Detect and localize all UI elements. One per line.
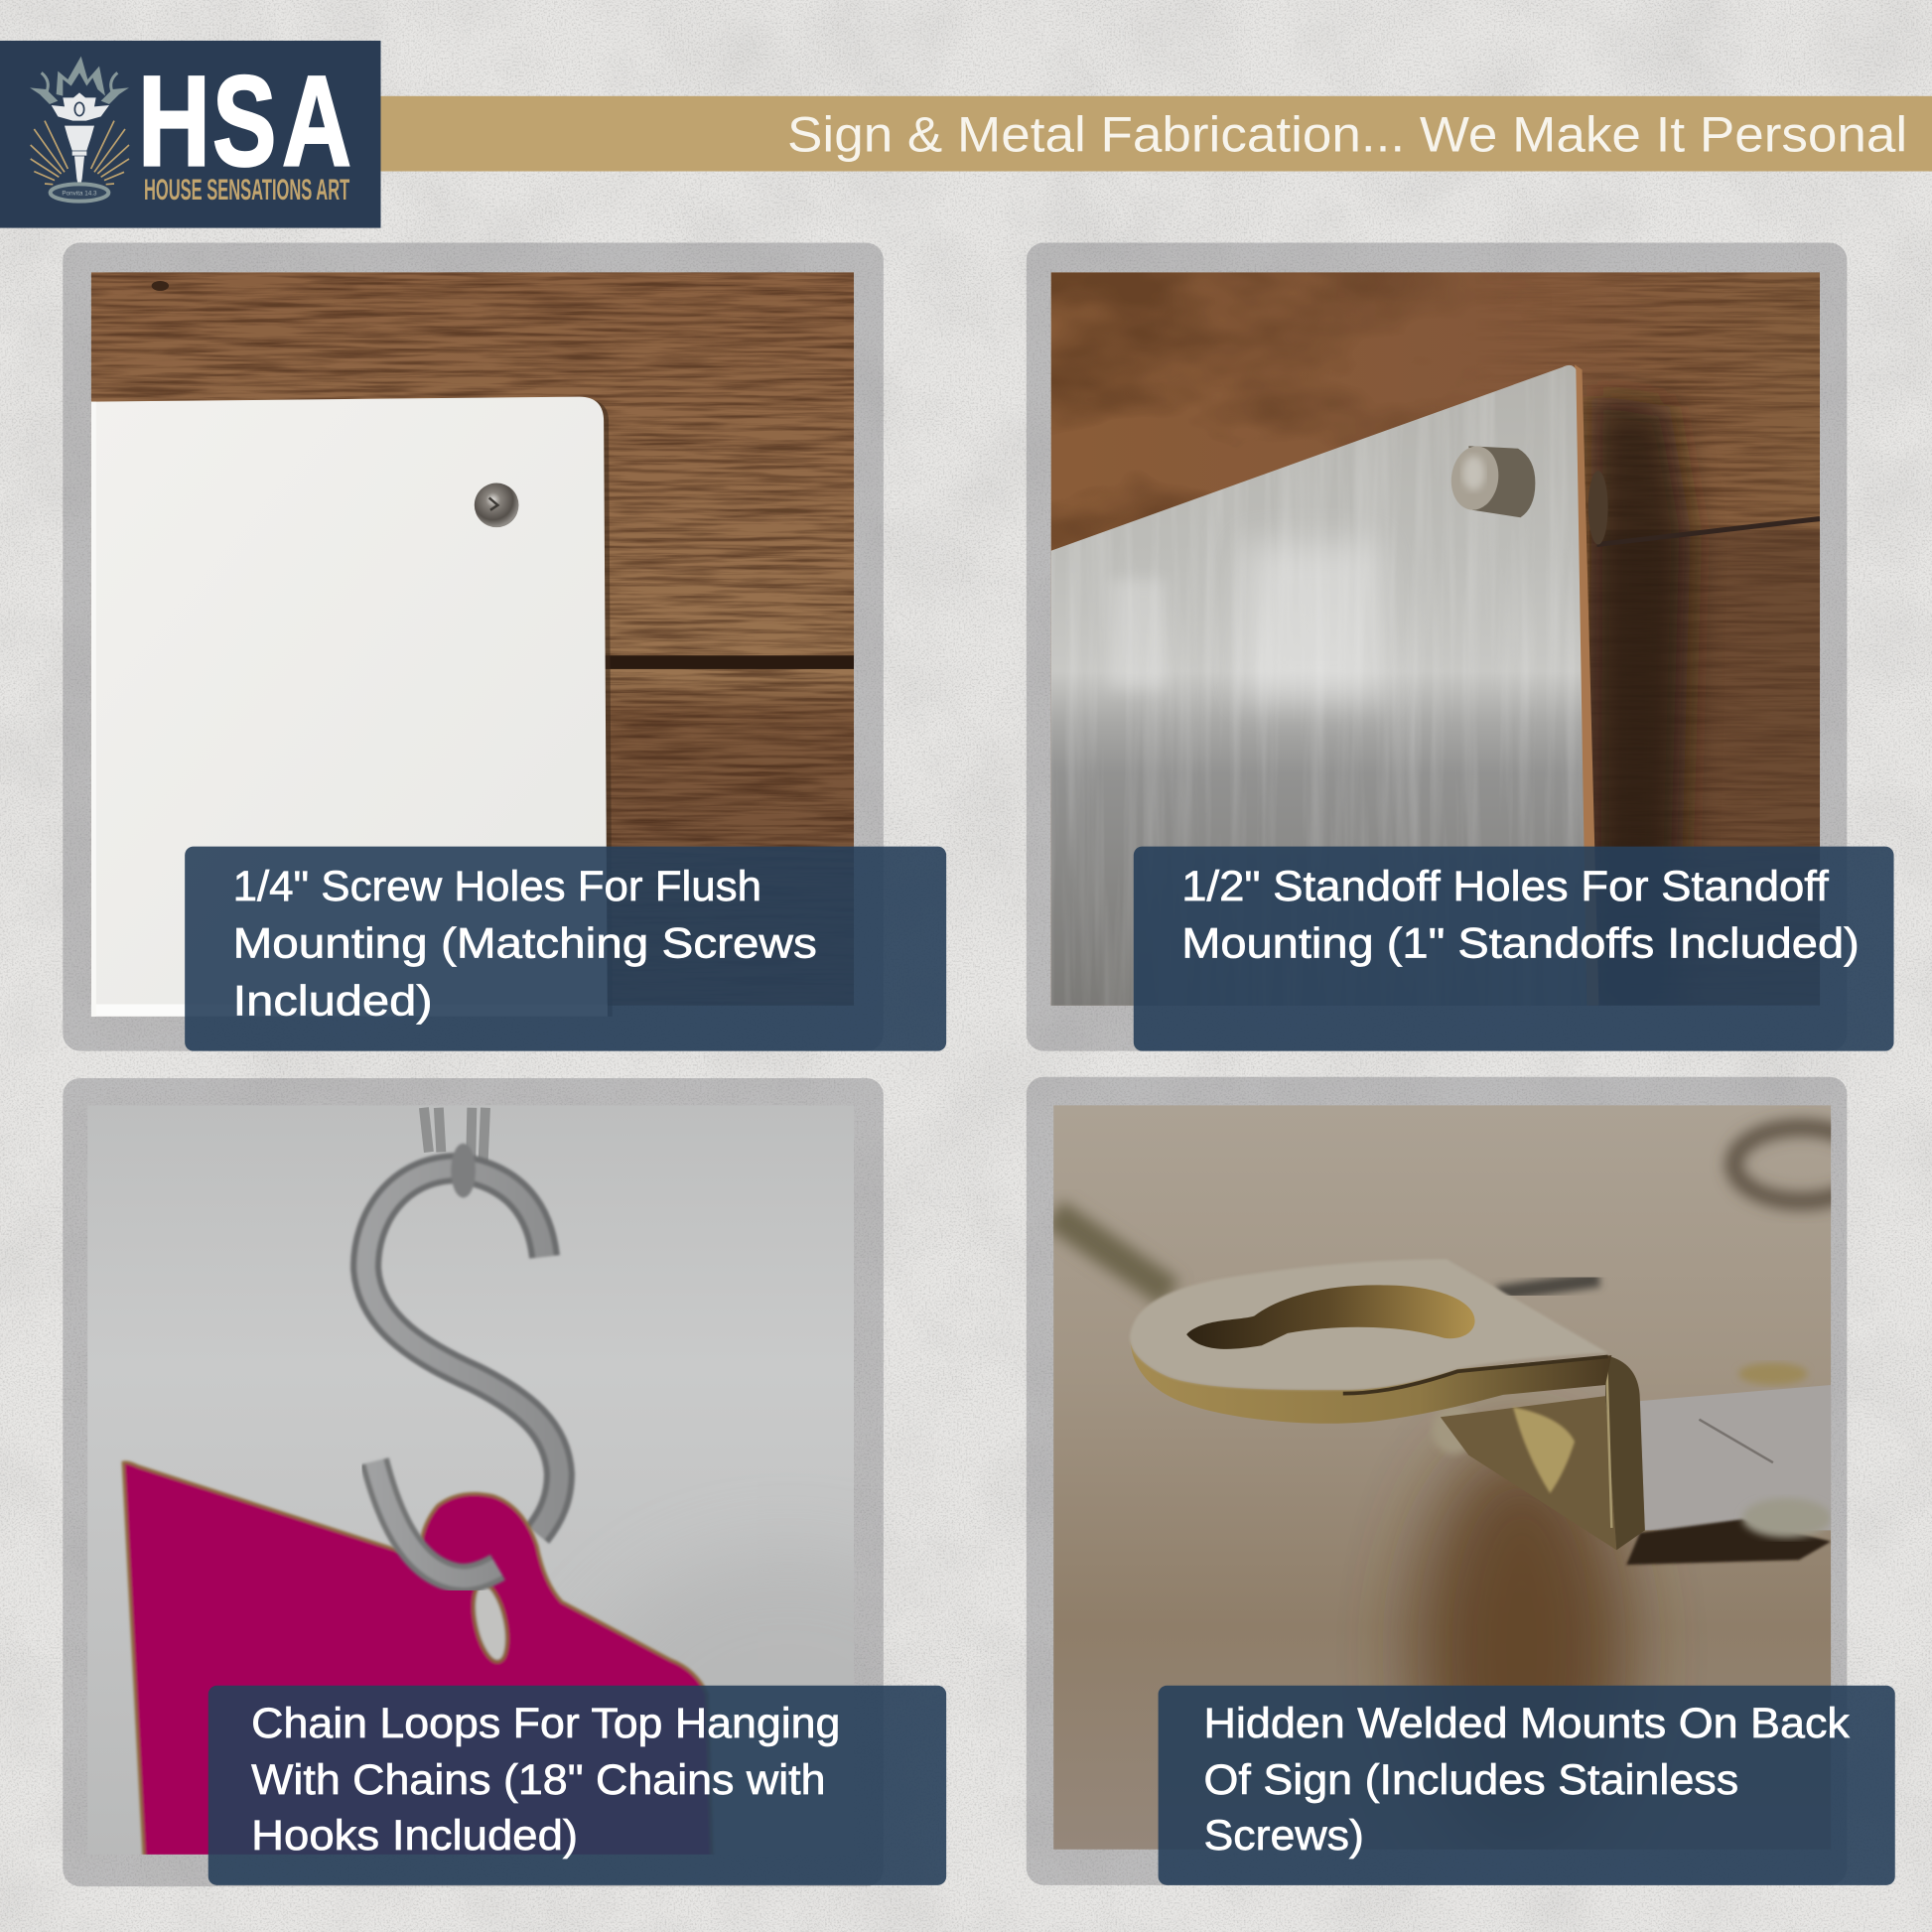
panel: chain loops xyxy=(63,1078,947,1886)
pink sign xyxy=(123,1462,712,1861)
caption: chain loops: With Chains (18" Chains with xyxy=(251,1756,826,1803)
photo: brushed metal sign with standoff xyxy=(1051,272,1824,1023)
photo: welded keyhole mount xyxy=(1053,1105,1869,1861)
icon: S hook xyxy=(366,1144,559,1534)
caption: screw holes: 1/4" Screw Holes For Flush xyxy=(233,863,761,909)
brand letters: A xyxy=(282,50,351,193)
icon: keyhole bracket xyxy=(1130,1259,1645,1550)
caption: standoff holes xyxy=(1134,847,1894,1051)
caption: chain loops: Hooks Included) xyxy=(251,1812,578,1859)
icon: screw xyxy=(475,483,518,527)
caption: hidden welded mounts: Hidden Welded Mounts On Back xyxy=(1204,1700,1851,1746)
icon: lower hook end xyxy=(374,1461,497,1579)
caption: standoff holes: 1/2" Standoff Holes For Standoff xyxy=(1181,863,1829,909)
caption: standoff holes: Mounting (1" Standoffs Included) xyxy=(1181,919,1860,966)
caption: chain loops: Chain Loops For Top Hanging xyxy=(251,1700,840,1746)
caption: screw holes: Included) xyxy=(233,978,433,1025)
icon: torch with lotus flame: Ponvita 14.3 xyxy=(62,190,97,197)
icon: standoff xyxy=(1448,443,1535,517)
panel: screw holes xyxy=(63,242,946,1051)
caption: hidden welded mounts: Screws) xyxy=(1204,1812,1364,1859)
caption: screw holes xyxy=(185,847,946,1051)
photo: S-hook and pink sign xyxy=(87,1106,854,1855)
icon: torch with lotus flame xyxy=(30,57,129,202)
caption: hidden welded mounts xyxy=(1159,1686,1895,1885)
brand name: HOUSE SENSATIONS ART xyxy=(144,174,349,207)
panel: standoff holes xyxy=(1027,242,1894,1051)
brand letters: H xyxy=(138,50,210,193)
right base plate xyxy=(1640,1385,1831,1530)
logo block: HSA House Sensations Art xyxy=(0,41,380,228)
icon: chain links xyxy=(424,1108,485,1165)
caption: chain loops xyxy=(208,1686,946,1885)
tagline: Sign & Metal Fabrication... We Make It Personal xyxy=(787,107,1907,163)
brand letters xyxy=(138,50,351,193)
photo: white sign on wood with screw xyxy=(91,272,854,1019)
gold header bar with tagline xyxy=(380,96,1932,172)
brand letters: S xyxy=(212,50,276,193)
caption: hidden welded mounts: Of Sign (Includes Stainless xyxy=(1204,1756,1738,1803)
caption: screw holes: Mounting (Matching Screws xyxy=(233,919,817,966)
panel: hidden welded mounts xyxy=(1027,1077,1895,1885)
